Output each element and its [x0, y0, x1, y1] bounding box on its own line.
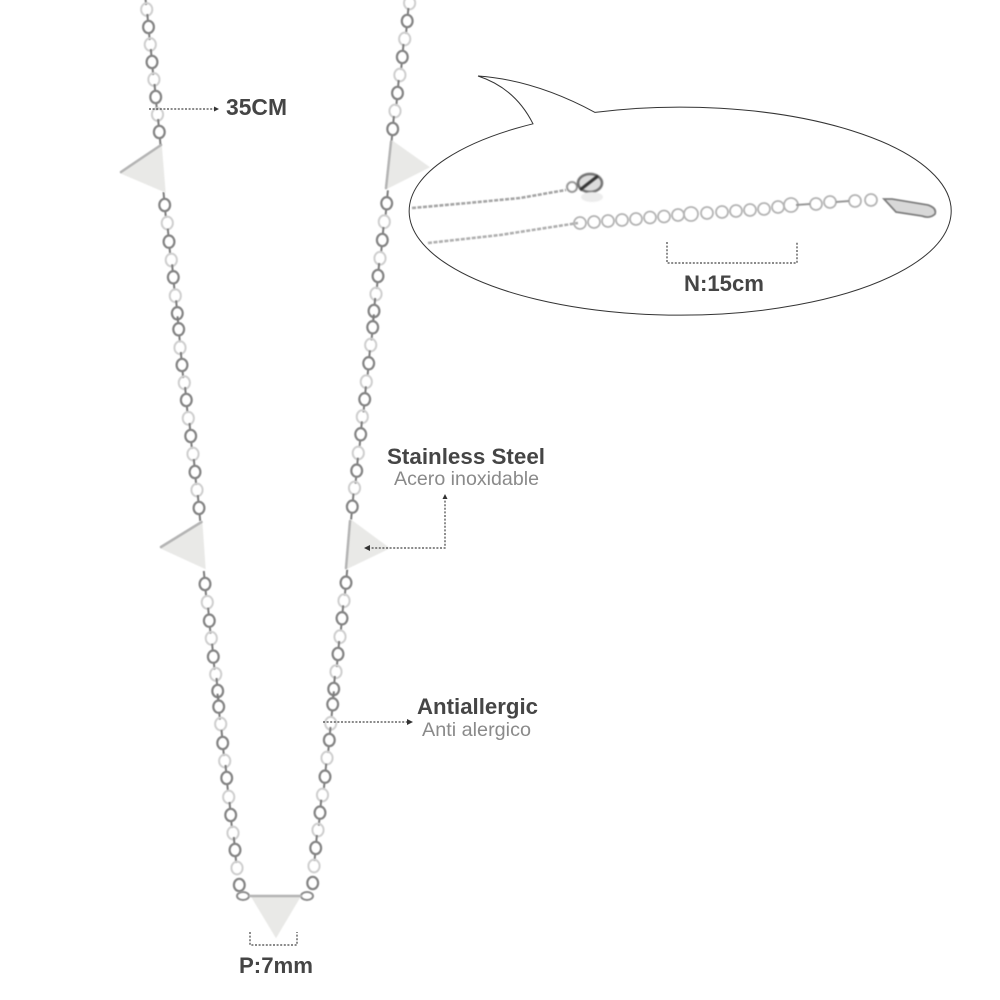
pendant size label: P:7mm [239, 953, 313, 978]
extender length bracket [667, 242, 797, 263]
extender chain [428, 194, 877, 243]
pendant size bracket [250, 932, 297, 945]
antiallergic callout arrow [323, 719, 413, 725]
extender length label: N:15cm [684, 271, 764, 296]
left chain [140, 0, 245, 891]
length label: 35CM [226, 94, 287, 120]
teardrop tag [884, 199, 935, 217]
lobster clasp [567, 174, 603, 202]
pendant: triangle bottom [237, 892, 313, 938]
antiallergic label [417, 694, 538, 741]
pendant: triangle upper left [120, 144, 166, 193]
material label: Acero inoxidable [394, 468, 539, 490]
right chain [307, 0, 417, 889]
antiallergic label: Antiallergic [417, 694, 538, 719]
pendant: triangle middle right [345, 519, 390, 570]
material callout arrow [364, 494, 448, 551]
speech bubble with clasp and extender chain detail [409, 76, 951, 315]
pendant: triangle upper right [385, 140, 430, 190]
material label: Stainless Steel [387, 444, 545, 469]
length callout arrow [149, 106, 219, 112]
antiallergic label: Anti alergico [422, 719, 531, 741]
material label [387, 444, 545, 490]
pendant: triangle middle left [160, 521, 206, 569]
necklace end chain [412, 190, 566, 208]
